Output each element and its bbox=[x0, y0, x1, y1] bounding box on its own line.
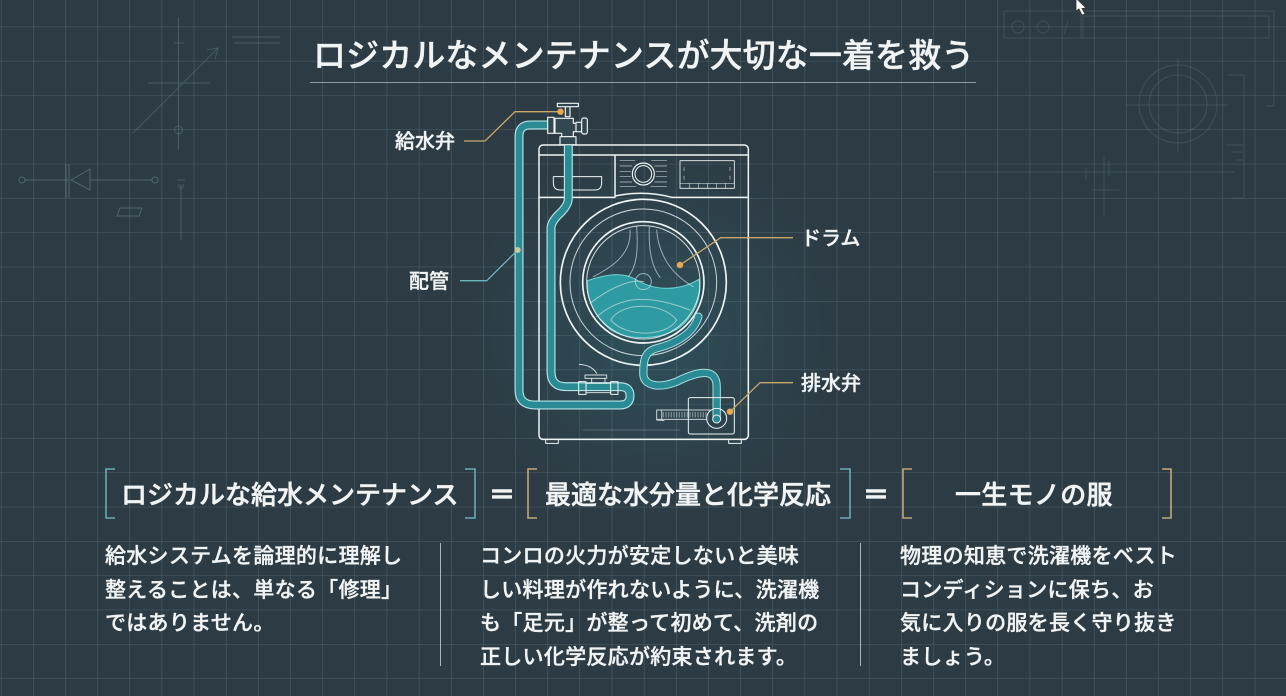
text column 2: しい料理が作れないように、洗濯機 bbox=[480, 579, 819, 602]
drain pump bbox=[583, 398, 734, 434]
text column 1: 給水システムを論理的に理解し bbox=[105, 545, 402, 568]
text column 2: も「足元」が整って初めて、洗剤の bbox=[480, 612, 818, 635]
label: ドラム: ドラム bbox=[801, 228, 860, 250]
text column 2: 正しい化学反応が約束されます。 bbox=[480, 646, 797, 669]
door rings bbox=[560, 199, 726, 365]
supply pipe bbox=[519, 125, 630, 405]
drum baffles bbox=[590, 227, 693, 333]
drain pipe bbox=[643, 317, 717, 418]
lower valve bbox=[579, 364, 618, 394]
text column 1 bbox=[105, 544, 402, 635]
title underline bbox=[310, 82, 976, 83]
water tap valve bbox=[548, 103, 587, 145]
washer body bbox=[539, 145, 748, 443]
equals sign 1: ＝ bbox=[489, 480, 515, 510]
title: ロジカルなメンテナンスが大切な一着を救う bbox=[313, 37, 974, 74]
text column 3: 物理の知恵で洗濯機をベスト bbox=[900, 545, 1177, 568]
text column 1: 整えることは、単なる「修理」 bbox=[105, 579, 402, 602]
text column 2: コンロの火力が安定しないと美味 bbox=[480, 545, 799, 568]
label: 配管: 配管 bbox=[409, 271, 449, 293]
equation term 1: ロジカルな給水メンテナンス bbox=[121, 480, 458, 510]
equation term 2: 最適な水分量と化学反応 bbox=[545, 480, 831, 510]
text column 3 bbox=[900, 544, 1177, 669]
water in drum bbox=[587, 275, 700, 338]
text column 3: コンディションに保ち、お bbox=[900, 579, 1154, 602]
text column 3: ましょう。 bbox=[900, 646, 1005, 669]
divider 1 bbox=[440, 543, 441, 666]
divider 2 bbox=[860, 543, 861, 666]
text column 1: ではありません。 bbox=[105, 612, 275, 635]
equation term 3: 一生モノの服 bbox=[955, 480, 1113, 510]
text column 3: 気に入りの服を長く守り抜き bbox=[900, 612, 1177, 635]
text column 2 bbox=[480, 544, 819, 669]
label: 排水弁: 排水弁 bbox=[801, 373, 861, 395]
label: 給水弁: 給水弁 bbox=[395, 131, 455, 153]
equals sign 2: ＝ bbox=[863, 480, 889, 510]
